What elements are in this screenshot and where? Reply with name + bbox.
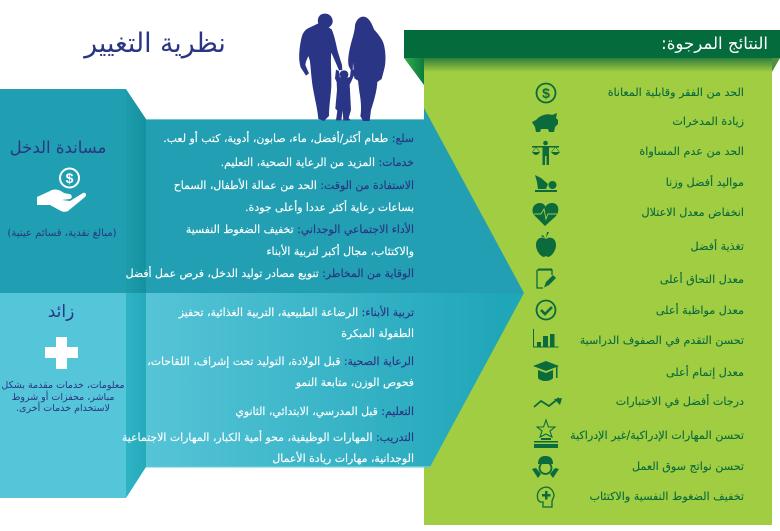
icon: scales figure xyxy=(532,141,560,165)
icon: head with plus xyxy=(537,487,554,507)
text block: plus uses xyxy=(122,306,414,465)
icon: notepad xyxy=(537,268,556,288)
panel: upper arrow xyxy=(146,108,524,293)
caption: cash and vouchers: (مبالغ نقدية، قسائم عينية) xyxy=(7,228,117,239)
fold: upper xyxy=(126,89,146,293)
list: expected outcomes: مواليد أفضل وزنا xyxy=(666,176,744,189)
icon: trend line xyxy=(534,398,562,407)
icon: baby weighing xyxy=(535,175,557,192)
icon: dollar xyxy=(536,84,556,102)
list: expected outcomes: الحد من الفقر وقابلية المعاناة xyxy=(608,86,744,99)
caption: information and services: مباشر، محفزات أو شروط xyxy=(12,392,114,402)
list: expected outcomes: تحسن نواتج سوق العمل xyxy=(632,460,744,473)
list: expected outcomes: تخفيف الضغوط النفسية والاكتئاب xyxy=(589,490,744,503)
icon: dollar: $ xyxy=(542,85,550,101)
text block: income support uses: الوقاية من المخاطر: تنويع مصادر توليد الدخل، فرص عمل أفضل xyxy=(126,267,414,280)
fold: lower xyxy=(126,293,146,498)
icon: graduation cap xyxy=(533,361,559,381)
text block: plus uses: التعليم: قبل المدرسي، الابتدائي، الثانوي xyxy=(235,405,414,418)
panel: outcomes green xyxy=(424,58,772,525)
text block: income support uses: خدمات: المزيد من الرعاية الصحية، التعليم. xyxy=(221,156,414,169)
list: expected outcomes: معدل التحاق أعلى xyxy=(660,273,744,286)
icon: coin in hand xyxy=(37,168,86,212)
text block: plus uses: الطفولة المبكرة xyxy=(341,327,414,340)
icon: check circle xyxy=(536,300,556,320)
text block: income support uses: الاستفادة من الوقت: الحد من عمالة الأطفال، السماح xyxy=(174,179,414,192)
text block: income support uses xyxy=(126,131,414,280)
icon: bar chart xyxy=(533,329,558,348)
list: expected outcomes: الحد من عدم المساواة xyxy=(639,145,744,158)
icon: family silhouette xyxy=(299,14,385,121)
caption: information and services xyxy=(1,380,125,414)
text block: plus uses: الوجدانية، مهارات ريادة الأعمال xyxy=(272,452,414,465)
caption: information and services: معلومات، خدمات مقدمة بشكل xyxy=(1,380,125,391)
list: expected outcomes: تحسن التقدم في الصفوف الدراسية xyxy=(580,334,744,347)
list: expected outcomes xyxy=(570,86,744,503)
text block: plus uses: التدريب: المهارات الوظيفية، محو أمية الكبار، المهارات الاجتماعية xyxy=(122,431,414,444)
icon: apple xyxy=(536,232,556,257)
panel: lower arrow xyxy=(146,293,524,467)
heading: plus: زائد xyxy=(48,302,74,322)
list: expected outcomes: زيادة المدخرات xyxy=(672,115,744,128)
list: expected outcomes: انخفاض معدل الاعتلال xyxy=(642,206,744,219)
icon: star trophy xyxy=(534,420,558,448)
text block: income support uses: سلع: طعام أكثر/أفضل، ماء، صابون، أدوية، كتب أو لعب. xyxy=(163,132,414,145)
text block: income support uses: بساعات رعاية أكثر عددا وأعلى جودة. xyxy=(245,201,414,214)
list: expected outcomes: درجات أفضل في الاختبارات xyxy=(616,395,744,408)
text block: income support uses: الأداء الاجتماعي الوجداني: تخفيف الضغوط النفسية xyxy=(186,223,414,236)
list: expected outcomes: تحسن المهارات الإدراكية/غير الإدراكية xyxy=(570,429,744,442)
heading: outcomes: النتائج المرجوة: xyxy=(661,34,768,53)
panel: plus side xyxy=(0,293,126,498)
text block: plus uses: تربية الأبناء: الرضاعة الطبيعية، التربية الغذائية، تحفيز xyxy=(179,306,414,319)
list: expected outcomes: معدل مواظبة أعلى xyxy=(656,304,744,317)
title: نظرية التغيير xyxy=(84,28,226,59)
text block: plus uses: الرعاية الصحية: قبل الولادة، التوليد تحت إشراف، اللقاحات، xyxy=(147,355,414,368)
icon: heart pulse xyxy=(533,203,558,226)
panel: income support side xyxy=(0,89,126,293)
panel text: income support xyxy=(7,138,117,239)
list: expected outcomes: تغذية أفضل xyxy=(691,240,744,253)
icon: worker with wrenches xyxy=(532,456,559,478)
icon: plus xyxy=(45,337,78,369)
list: expected outcomes: معدل إتمام أعلى xyxy=(666,366,744,379)
text block: income support uses: والاكتئاب، مجال أكبر لتربية الأبناء xyxy=(266,245,414,258)
heading: income support: مساندة الدخل xyxy=(10,138,106,157)
icon: coin in hand: $ xyxy=(66,170,74,186)
text block: plus uses: فحوص الوزن، متابعة النمو xyxy=(296,376,414,389)
panel text: plus xyxy=(1,302,125,414)
icon: piggy bank xyxy=(532,113,558,132)
header bar xyxy=(404,30,780,85)
caption: information and services: لاستخدام خدمات أخرى. xyxy=(16,403,110,414)
